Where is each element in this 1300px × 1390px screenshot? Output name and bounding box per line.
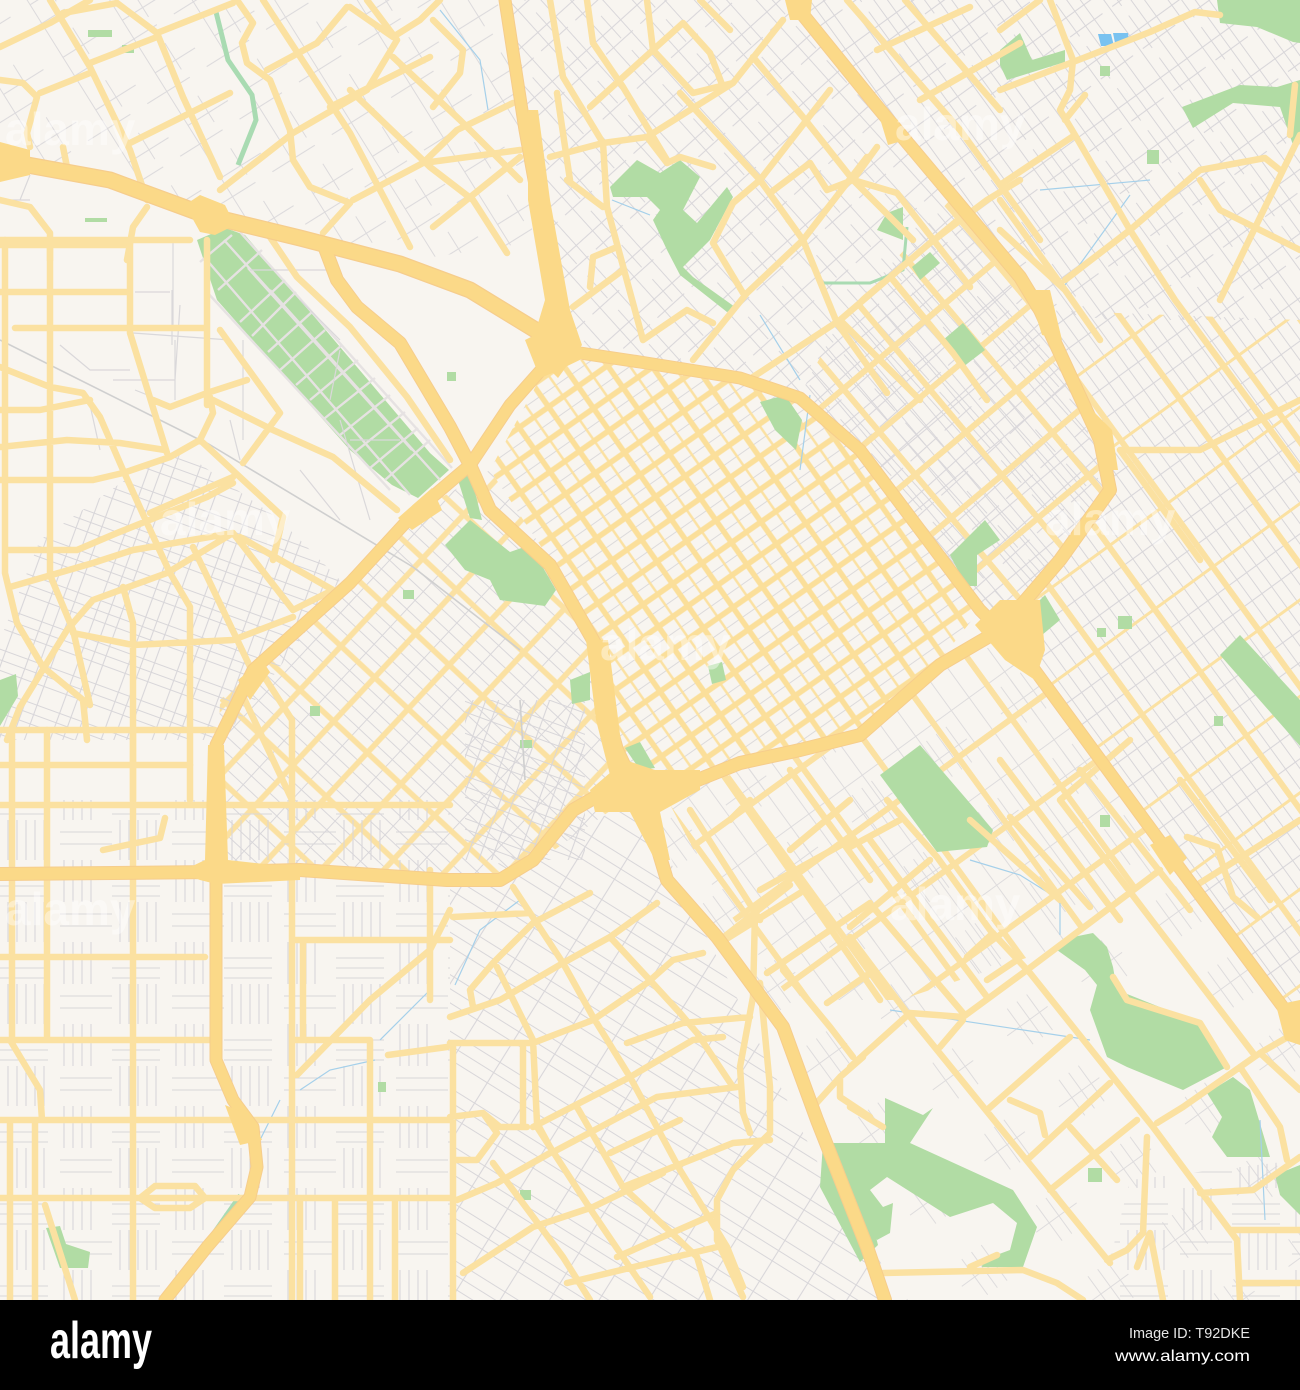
website: www.alamy.com: [1114, 1348, 1250, 1365]
arterials: northwest: [0, 0, 520, 260]
arterials: west grid: [0, 730, 450, 1300]
freeway: northwest corridor: [0, 160, 560, 345]
water reservoirs: [1098, 33, 1129, 46]
watermark text: alamy: [5, 883, 136, 935]
park: south east block: [1207, 1077, 1270, 1157]
park: top right corner: [1217, 0, 1300, 43]
arterial: airport east road: [270, 237, 450, 460]
freeway: south diagonal: [323, 243, 885, 1300]
arterials: west middle: [0, 240, 397, 800]
watermark text: alamy: [600, 618, 731, 670]
park: east L shape: [950, 520, 1000, 586]
park: edge south east: [1275, 1165, 1300, 1215]
park: north field: [1000, 33, 1065, 80]
airport: [197, 228, 452, 498]
park: strip: [458, 472, 482, 520]
watermark text: alamy: [1045, 493, 1176, 545]
arterials: north east: [1000, 0, 1300, 560]
airport taxiways and runways: [200, 232, 452, 495]
park: west edge: [0, 674, 18, 726]
rail lines: [0, 340, 525, 780]
footer bar: [0, 1300, 1300, 1390]
watermark text: alamy: [160, 493, 291, 545]
minor streets: [0, 175, 400, 520]
park: south hills: [850, 1098, 1037, 1267]
park: large south east field: [880, 745, 993, 852]
arterials: south middle: [450, 810, 870, 1300]
park: river bend: [625, 742, 655, 770]
park: interchange: [1015, 595, 1060, 645]
park: small squares: [85, 30, 1223, 1200]
park: east airfield: [1220, 635, 1300, 746]
freeway: north south west loop: [165, 0, 558, 1300]
park: downtown pockets: [708, 662, 726, 684]
footer logo: alamy: [50, 1312, 152, 1370]
park: ring road edge: [760, 395, 802, 450]
park: freeway triangle: [445, 520, 556, 606]
canals and creeks: [168, 10, 1265, 1300]
park: north central: [610, 160, 735, 312]
park: transit strip: [570, 672, 590, 704]
arterials: north middle: [550, 0, 1040, 400]
park: northeast hills band: [1182, 80, 1300, 145]
park: central block: [877, 207, 903, 240]
park: southwest: [46, 1226, 90, 1268]
arterials: south east: [720, 740, 1300, 1300]
image id: Image ID: T92DKE: [1129, 1326, 1250, 1342]
watermark text: alamy: [5, 103, 136, 155]
park: south strip: [820, 1143, 878, 1262]
park: winding creek park: [1057, 933, 1227, 1090]
freeway: north east and east west: [0, 5, 1110, 880]
park: square 2: [943, 323, 985, 367]
airport field: [197, 228, 449, 498]
watermark text: [5, 98, 1176, 935]
watermark text: alamy: [895, 98, 1026, 150]
freeway: east ring: [560, 350, 1300, 1030]
watermark text: alamy: [890, 878, 1021, 930]
park: square 1: [912, 252, 940, 280]
